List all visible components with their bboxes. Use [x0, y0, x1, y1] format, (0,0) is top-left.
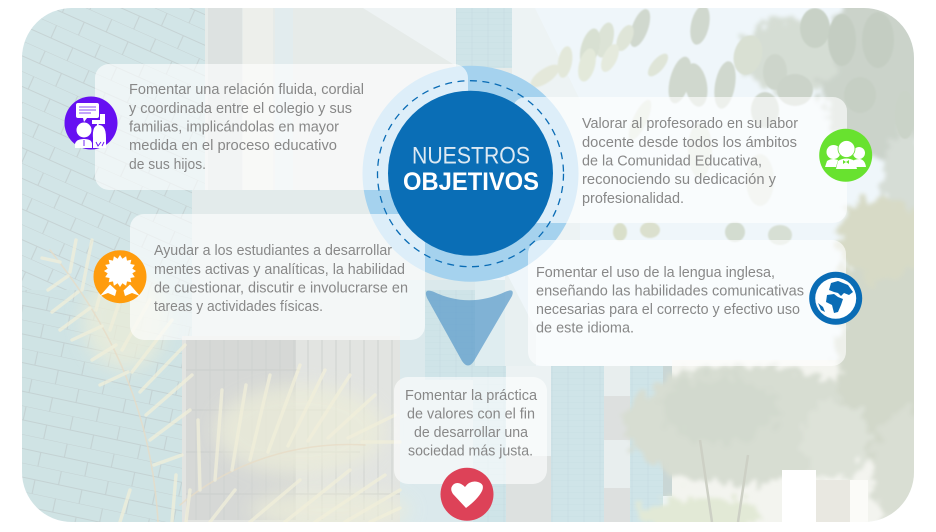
- central circle: title: [378, 81, 564, 267]
- panel background: [528, 240, 846, 366]
- text block: Fomentar la práctica: [405, 388, 537, 404]
- text block: profesionalidad.: [582, 191, 684, 207]
- text block: de sus hijos.: [129, 157, 206, 173]
- panel: family relationship: [64, 64, 468, 190]
- panel: active minds: [94, 214, 425, 340]
- text block: familias, implicándolas en mayor: [129, 120, 339, 136]
- text block: y coordinada entre el colegio y sus: [129, 101, 352, 117]
- arrow pointing down: [426, 290, 513, 366]
- windows: [182, 336, 402, 522]
- palm fronds: [42, 240, 400, 522]
- icon: heart: [440, 468, 494, 521]
- icon: globe: [809, 272, 862, 325]
- text block: mentes activas y analíticas, la habilidad: [154, 262, 405, 278]
- title: OBJETIVOS: [403, 168, 539, 196]
- panel: English language: [528, 240, 862, 366]
- icon: award rosette: [94, 250, 146, 303]
- text block: de cuestionar, discutir e involucrarse en: [154, 280, 408, 296]
- panel background: [130, 214, 425, 340]
- upper right tree leaves: [738, 8, 914, 272]
- text block: Ayudar a los estudiantes a desarrollar: [154, 243, 392, 259]
- palm foliage haze: [80, 286, 400, 520]
- text block: docente desde todos los ámbitos: [582, 135, 797, 151]
- text block: Fomentar una relación fluida, cordial: [129, 82, 364, 98]
- panel background: [512, 97, 847, 223]
- ring around the central circle: [362, 66, 578, 282]
- text block: de valores con el fin: [407, 406, 535, 422]
- text block: enseñando las habilidades comunicativas: [536, 284, 804, 300]
- text block: de la Comunidad Educativa,: [582, 154, 762, 170]
- text block: Valorar al profesorado en su labor: [582, 116, 798, 132]
- panel: values: [394, 377, 547, 521]
- text block: reconociendo su dedicación y: [582, 172, 777, 188]
- central building: [400, 282, 475, 522]
- lower right trees: [672, 366, 882, 522]
- panel: teachers: [512, 97, 872, 223]
- panel background: [95, 64, 468, 190]
- text block: necesarias para el correcto y efectivo uso: [536, 302, 800, 318]
- text block: medida en el proceso educativo: [129, 138, 337, 154]
- text block: de este idioma.: [536, 321, 634, 337]
- panel background: [394, 377, 547, 484]
- icon: group of teachers: [819, 129, 872, 182]
- text block: sociedad más justa.: [408, 444, 533, 460]
- text block: Fomentar el uso de la lengua inglesa,: [536, 265, 775, 281]
- text block: de desarrollar una: [414, 425, 528, 441]
- title: NUESTROS: [412, 142, 530, 169]
- text block: tareas y actividades físicas.: [154, 299, 323, 315]
- icon: family with speech bubbles: [64, 96, 118, 150]
